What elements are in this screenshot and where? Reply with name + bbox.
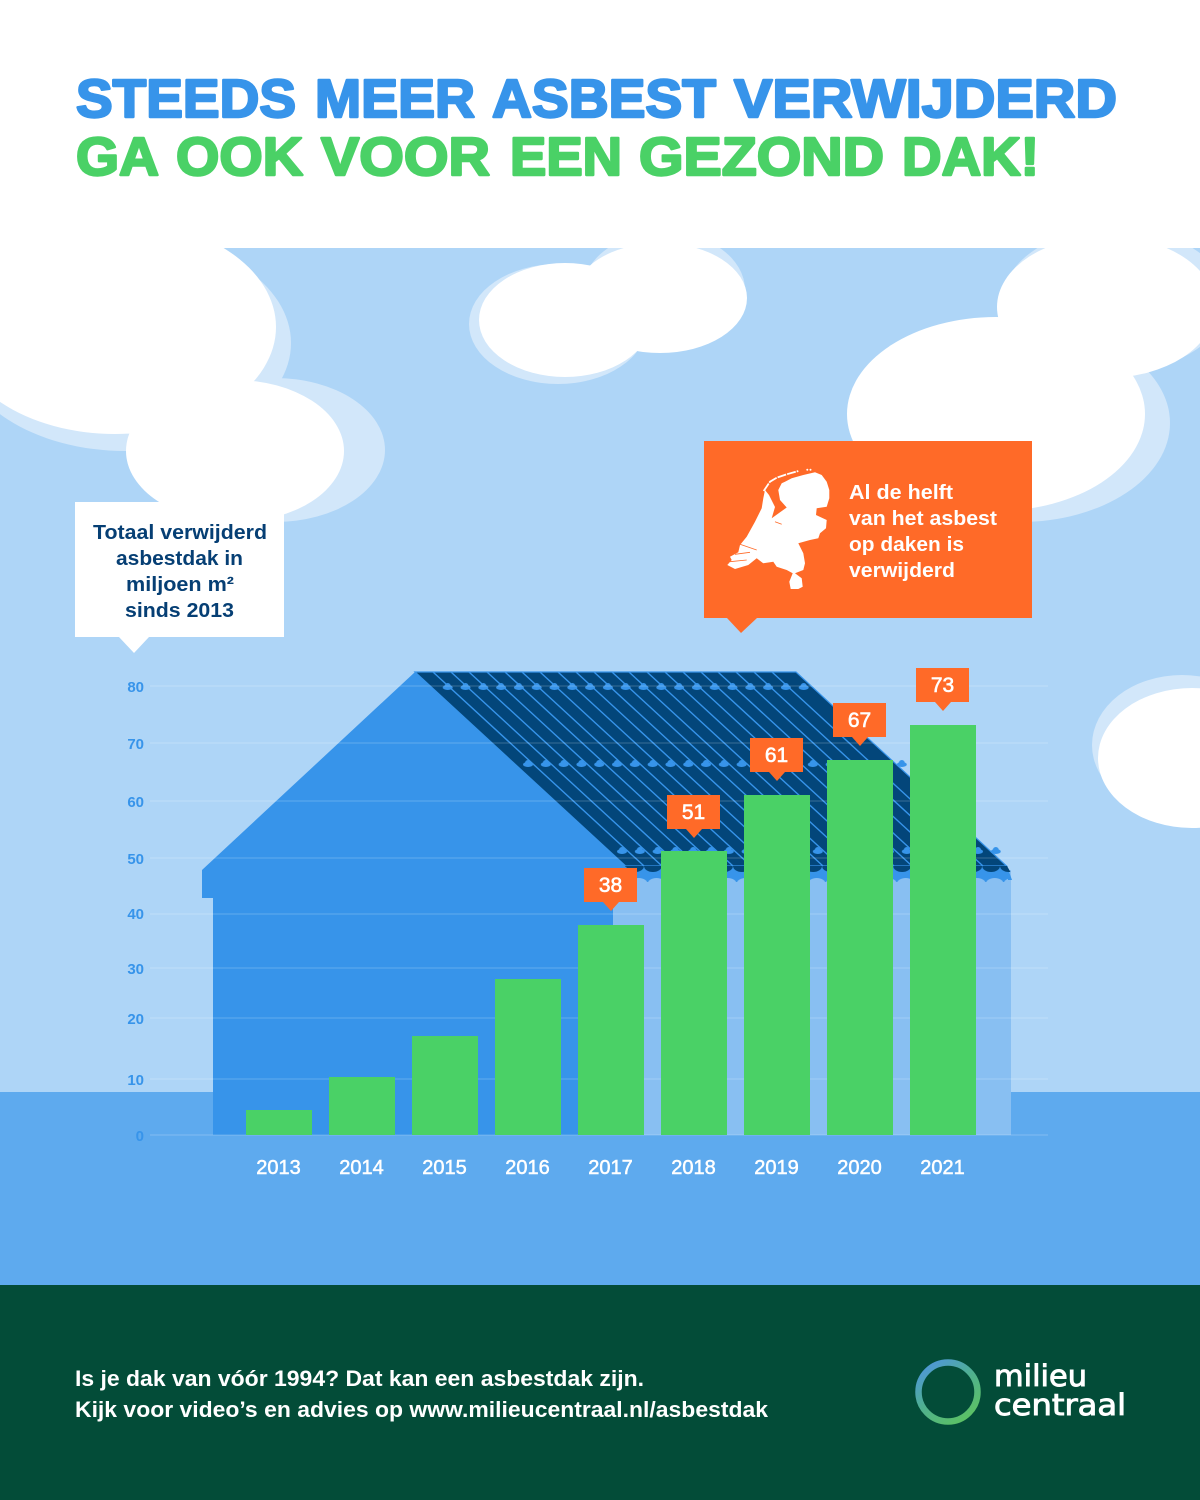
title: [76, 69, 1117, 187]
title line 2: VOOR: [321, 127, 490, 187]
callout: axis title: sinds 2013: [125, 600, 234, 622]
x axis labels: 2017: [588, 1157, 633, 1179]
x axis labels: 2019: [754, 1157, 799, 1179]
title line 1: STEEDS: [76, 69, 296, 129]
x axis labels: 2014: [339, 1157, 384, 1179]
x axis labels: 2015: [422, 1157, 467, 1179]
logo: milieu centraal: milieu: [994, 1359, 1087, 1393]
clouds: [0, 190, 1200, 828]
logo: milieu centraal: centraal: [994, 1388, 1126, 1422]
grid lines: [150, 686, 1048, 1135]
value 51: 51: [682, 801, 705, 824]
x axis labels: 2016: [505, 1157, 550, 1179]
y axis labels: 60: [127, 794, 144, 811]
roof eave band: [612, 866, 1012, 882]
y axis labels: 20: [127, 1011, 144, 1028]
title line 2: DAK!: [902, 127, 1039, 187]
title line 1: VERWIJDERD: [734, 69, 1117, 129]
house gable: blue left side: [202, 672, 640, 1135]
callout: half removed: op daken is: [849, 534, 964, 556]
value 73: [916, 668, 969, 711]
title line 2: [76, 127, 1039, 187]
footer text: Kijk voor video’s en advies op www.milieucentraal.nl/asbestdak: [75, 1397, 769, 1422]
roof ridges: [433, 672, 983, 866]
x axis labels: 2020: [837, 1157, 882, 1179]
y axis labels: 0: [136, 1128, 144, 1145]
footer text: [75, 1366, 769, 1422]
value 38: 38: [599, 874, 622, 897]
footer panel: [0, 1285, 1200, 1500]
value 61: 61: [765, 744, 788, 767]
title line 1: ASBEST: [492, 69, 716, 129]
value 38: [584, 868, 637, 911]
sky background: [0, 248, 1200, 1092]
title line 2: GA: [76, 127, 159, 187]
title line 1: [76, 69, 1117, 129]
y axis labels: 30: [127, 961, 144, 978]
callout: half removed: [704, 441, 1032, 633]
title line 2: GEZOND: [639, 127, 884, 187]
value labels: [584, 668, 969, 911]
bar chart: [246, 725, 976, 1135]
callout: half removed: van het asbest: [849, 508, 997, 530]
value 61: [750, 738, 803, 781]
value 73: 73: [931, 674, 954, 697]
callout: half removed: verwijderd: [849, 560, 955, 582]
y axis labels: 70: [127, 736, 144, 753]
value 67: 67: [848, 709, 871, 732]
title line 1: MEER: [315, 69, 475, 129]
y axis labels: 80: [127, 679, 144, 696]
callout: axis title: miljoen m²: [126, 574, 234, 596]
house: [202, 672, 1012, 1135]
callout: axis title: asbestdak in: [116, 548, 243, 570]
x axis labels: [256, 1157, 965, 1179]
logo: milieu centraal: [918, 1359, 1126, 1422]
roof: [415, 672, 1007, 866]
callout: axis title: Totaal verwijderd: [93, 522, 267, 544]
footer text: Is je dak van vóór 1994? Dat kan een asbestdak zijn.: [75, 1366, 644, 1391]
value 67: [833, 703, 886, 746]
x axis labels: 2018: [671, 1157, 716, 1179]
x axis labels: 2021: [920, 1157, 965, 1179]
title line 2: OOK: [176, 127, 303, 187]
icon: map of the Netherlands: [727, 469, 829, 589]
value 51: [667, 795, 720, 838]
callout: half removed: Al de helft: [849, 482, 953, 504]
y axis labels: [127, 679, 144, 1145]
ground: [0, 1092, 1200, 1285]
roof rivets: [439, 680, 1001, 856]
callout: axis title: [75, 502, 284, 653]
y axis labels: 40: [127, 906, 144, 923]
y axis labels: 50: [127, 851, 144, 868]
y axis labels: 10: [127, 1072, 144, 1089]
x axis labels: 2013: [256, 1157, 301, 1179]
house wall: light right side: [600, 870, 1011, 1135]
title line 2: EEN: [510, 127, 622, 187]
